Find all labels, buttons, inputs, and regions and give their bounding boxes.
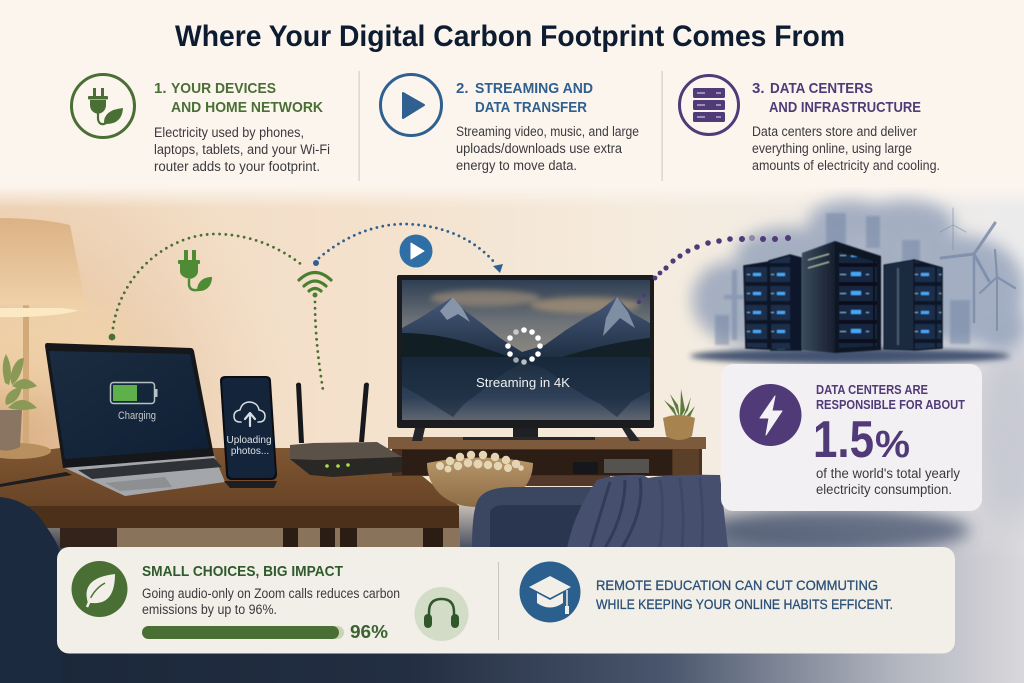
heading: YOUR DEVICES	[171, 80, 276, 97]
dotted path: tv to data centers	[637, 235, 791, 304]
icon: plug and leaf	[72, 74, 134, 138]
progress value: 96%	[350, 622, 388, 642]
loading spinner	[505, 327, 543, 365]
laptop label: Charging	[118, 410, 156, 422]
icon: play	[380, 74, 442, 136]
icon: headphones	[414, 587, 468, 641]
icon: plug and leaf	[178, 250, 212, 291]
callout heading: RESPONSIBLE FOR ABOUT	[816, 397, 965, 412]
phone label: photos...	[231, 446, 269, 457]
callout text: of the world's total yearly	[816, 466, 960, 481]
phone label: Uploading	[226, 435, 272, 446]
tip heading: SMALL CHOICES, BIG IMPACT	[142, 563, 343, 580]
description: energy to move data.	[456, 158, 577, 173]
cloud and city backdrop	[690, 200, 1024, 364]
heading: DATA CENTERS	[770, 80, 873, 97]
icon: leaf	[72, 561, 128, 617]
dotted arrow: wifi to tv	[313, 224, 503, 273]
description: Electricity used by phones,	[154, 125, 304, 140]
heading: STREAMING AND	[475, 80, 593, 97]
heading: 1.	[154, 80, 167, 97]
panel: tips	[57, 547, 955, 654]
icon: play badge	[400, 234, 432, 268]
title: Where Your Digital Carbon Footprint Comes From	[175, 20, 845, 53]
description: laptops, tablets, and your Wi-Fi	[154, 142, 330, 157]
television	[397, 275, 654, 441]
rack 4	[884, 260, 942, 350]
plant on left	[0, 354, 37, 451]
rack 1	[744, 262, 770, 349]
dotted path: laptop to wifi	[109, 234, 302, 340]
callout heading: DATA CENTERS ARE	[816, 382, 928, 397]
icon: server stack	[680, 76, 738, 134]
heading: 3.	[752, 80, 765, 97]
description: Data centers store and deliver	[752, 124, 917, 139]
TV stand	[388, 437, 706, 486]
header background	[0, 0, 1024, 187]
bowl of popcorn	[427, 451, 533, 507]
description: amounts of electricity and cooling.	[752, 158, 940, 173]
description: uploads/downloads use extra	[456, 141, 622, 156]
description: router adds to your footprint.	[154, 159, 320, 174]
tv caption: Streaming in 4K	[476, 375, 570, 390]
tip text: Going audio-only on Zoom calls reduces carbon	[142, 586, 400, 601]
background: wall and floor	[0, 190, 1024, 683]
router	[290, 382, 402, 477]
description	[752, 124, 940, 173]
heading: AND HOME NETWORK	[171, 99, 323, 116]
heading: DATA TRANSFER	[475, 99, 587, 116]
table	[0, 448, 460, 550]
statistic: 1.5	[813, 411, 874, 469]
sofa on right	[472, 487, 600, 548]
progress bar	[142, 626, 344, 639]
icon: wifi	[299, 272, 331, 297]
lamp	[0, 218, 130, 459]
description: everything online, using large	[752, 141, 912, 156]
sofa on left	[0, 497, 62, 683]
server racks	[744, 241, 942, 353]
description	[154, 125, 330, 174]
laptop	[0, 343, 225, 496]
tv picture: mountain lake	[402, 280, 650, 420]
panel: streaming and data transfer	[380, 74, 639, 173]
icon: wind turbines	[940, 208, 1015, 330]
panel: devices and home network	[72, 74, 330, 174]
dotted path: wifi to router	[315, 302, 323, 390]
description: Streaming video, music, and large	[456, 124, 639, 139]
icon: battery charging	[110, 382, 158, 404]
heading: AND INFRASTRUCTURE	[769, 99, 921, 116]
rack 2	[769, 255, 801, 350]
tip statement: WHILE KEEPING YOUR ONLINE HABITS EFFICENT.	[596, 596, 893, 612]
icon: graduation cap	[520, 562, 580, 622]
description	[456, 124, 639, 173]
panel: data centers and infrastructure	[680, 76, 940, 173]
heading: 2.	[456, 80, 469, 97]
phone	[220, 376, 277, 488]
tip statement: REMOTE EDUCATION CAN CUT COMMUTING	[596, 577, 878, 593]
tip text: emissions by up to 96%.	[142, 602, 277, 617]
callout: data center electricity	[721, 364, 982, 511]
plant by tv	[663, 389, 695, 440]
icon: lightning bolt	[740, 384, 802, 446]
statistic: %	[875, 424, 910, 466]
callout text: electricity consumption.	[816, 482, 952, 497]
rack 3	[802, 241, 881, 353]
icon: cloud upload	[234, 402, 265, 426]
blanket	[567, 475, 728, 548]
